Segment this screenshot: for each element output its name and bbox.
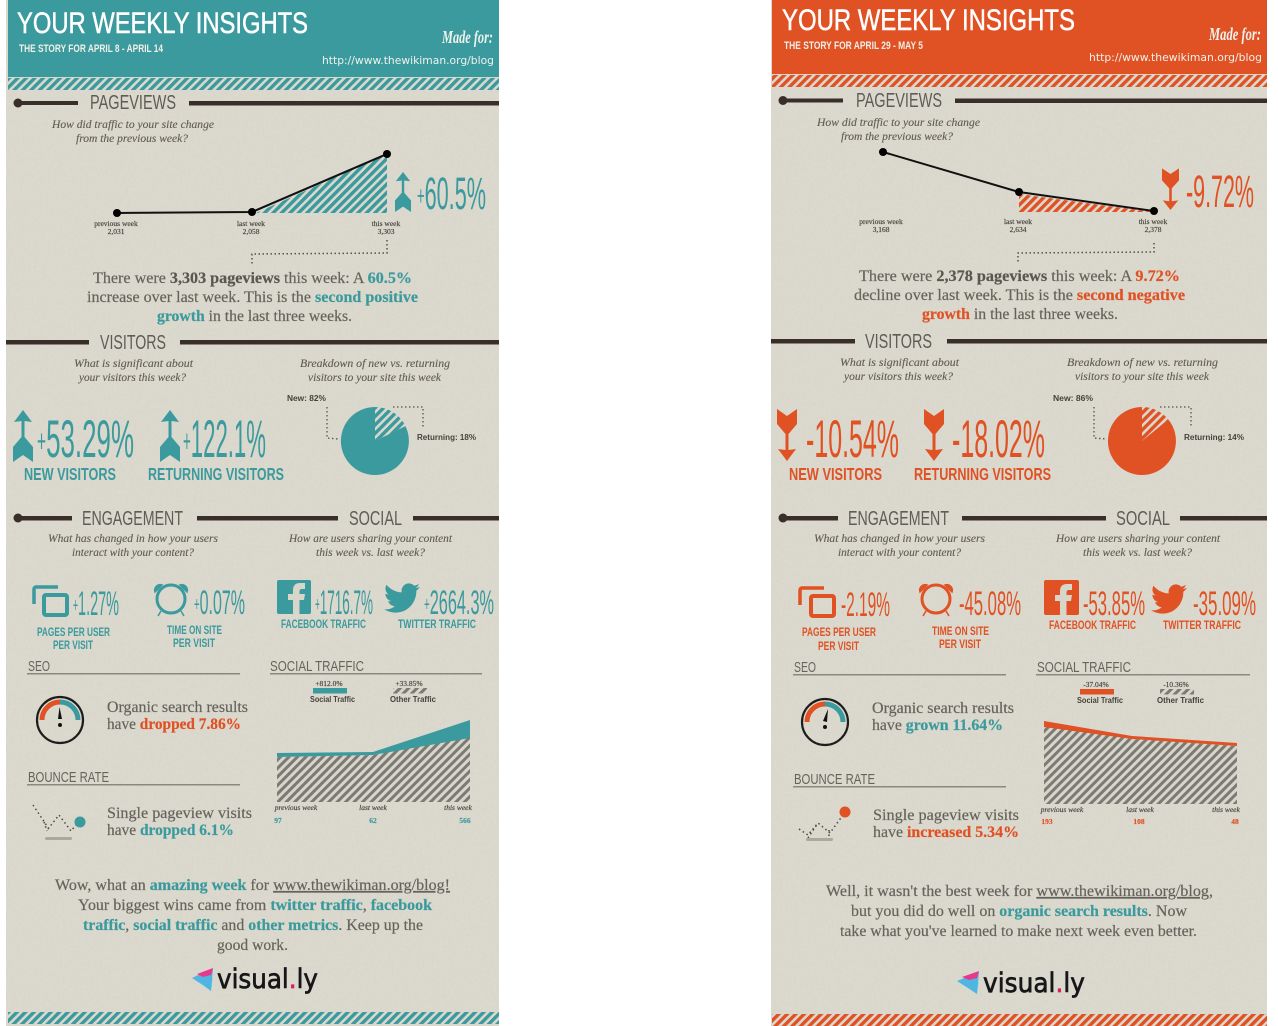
line chart: pageviews: 2,031	[108, 227, 125, 236]
closing message	[55, 877, 450, 954]
closing message: Well, it wasn't the best week for www.thewikiman.org/blog ,	[826, 883, 1213, 900]
arrow up: pageviews	[395, 172, 411, 212]
panel: orange weekly report: -53.85%	[1083, 585, 1145, 623]
pageviews summary	[854, 268, 1185, 323]
area chart: social traffic	[274, 720, 473, 825]
made for: Made for:	[441, 27, 493, 47]
pageviews summary: There were 2,378 pageviews this week: A 9.72%	[859, 268, 1180, 285]
engagement question: What has changed in how your users	[48, 533, 219, 545]
stat: twitter traffic: TWITTER TRAFFIC	[1163, 618, 1241, 632]
stat: twitter traffic: +	[424, 594, 430, 616]
social question: How are users sharing your content	[1055, 533, 1221, 545]
breakdown question	[1067, 357, 1218, 383]
chart legend: -37.04%	[1083, 680, 1109, 689]
stat: returning visitors: -18.02%	[952, 410, 1045, 469]
pageviews question: How did traffic to your site change	[51, 119, 214, 131]
area chart: social traffic: 62	[369, 816, 377, 825]
heading: bounce rate: BOUNCE RATE	[28, 769, 109, 786]
closing message: Wow, what an amazing week for www.thewikiman.org/blog!	[55, 877, 450, 894]
stat: returning visitors: RETURNING VISITORS	[914, 464, 1051, 484]
title: YOUR WEEKLY INSIGHTS	[782, 4, 1075, 37]
panel: orange weekly report: -2.19%	[841, 586, 890, 624]
url: http://www.thewikiman.org/blog	[322, 54, 494, 67]
breakdown question: Breakdown of new vs. returning	[1067, 357, 1218, 369]
area chart: social traffic: last week	[1126, 805, 1155, 814]
line chart: pageviews: last week	[1004, 217, 1032, 226]
pageviews summary: decline over last week. This is the second negative	[854, 287, 1185, 304]
seo text: Organic search results	[872, 700, 1014, 717]
chart legend: Social Traffic	[1077, 696, 1124, 705]
stat: pages per visit: +	[73, 595, 78, 617]
pageviews question	[816, 117, 980, 143]
icon: seo gauge	[802, 699, 848, 745]
title: YOUR WEEKLY INSIGHTS	[17, 7, 308, 40]
seo text	[872, 700, 1014, 734]
engagement question: interact with your content?	[838, 547, 961, 559]
dotted connector	[252, 240, 387, 265]
visitors question: What is significant about	[74, 358, 194, 370]
pageviews summary: growth in the last three weeks.	[922, 306, 1118, 323]
pageviews summary: growth in the last three weeks.	[157, 308, 352, 325]
bounce rate text	[107, 805, 252, 839]
icon: seo gauge	[37, 697, 83, 743]
stat: returning visitors: RETURNING VISITORS	[148, 464, 284, 484]
footer stripe band	[8, 1012, 499, 1024]
pie chart: new vs returning: Returning: 18%	[417, 433, 476, 442]
pie chart: new vs returning	[1053, 394, 1244, 475]
visitors question	[74, 358, 194, 384]
heading: pageviews: PAGEVIEWS	[90, 92, 176, 114]
chart legend	[1077, 680, 1205, 705]
panel: orange weekly report: -10.54%	[806, 410, 899, 469]
visitors question	[840, 357, 960, 383]
engagement question: interact with your content?	[72, 547, 194, 559]
stat: time on site: TIME ON SITE	[167, 623, 222, 637]
closing message	[826, 883, 1213, 940]
stat: facebook traffic: +	[315, 594, 320, 616]
pie chart: new vs returning	[287, 394, 476, 475]
header banner	[8, 0, 499, 77]
area chart: social traffic: this week	[1212, 805, 1241, 814]
stat: twitter traffic	[384, 583, 494, 631]
social question: How are users sharing your content	[288, 533, 453, 545]
area chart: social traffic: last week	[359, 803, 388, 812]
panel: teal weekly report: 60.5%	[425, 168, 486, 219]
stat: returning visitors: +	[183, 423, 191, 459]
stat: time on site: PER VISIT	[939, 637, 981, 651]
seo text: Organic search results	[107, 699, 248, 716]
stat: pages per visit: PER VISIT	[818, 639, 859, 653]
seo text: have grown 11.64%	[872, 717, 1003, 734]
stat: time on site: +	[194, 594, 200, 616]
panel: teal weekly report: 2664.3%	[430, 584, 494, 622]
stat: returning visitors	[914, 409, 1051, 484]
stat: time on site: PER VISIT	[173, 636, 215, 650]
dotted connector	[1018, 243, 1154, 263]
breakdown question: visitors to your site this week	[1075, 371, 1210, 383]
stat: new visitors	[13, 410, 134, 484]
stat: time on site: TIME ON SITE	[932, 624, 989, 638]
bounce rate text: Single pageview visits	[107, 805, 252, 822]
pageviews question: from the previous week?	[76, 133, 188, 145]
visitors question: What is significant about	[840, 357, 960, 369]
closing message: Your biggest wins came from twitter traffic, facebook	[78, 897, 432, 914]
social question	[288, 533, 453, 559]
heading: pageviews	[14, 92, 499, 114]
arrow down: pageviews	[1162, 168, 1179, 210]
bounce rate text	[873, 807, 1019, 841]
stat: pages per visit: PAGES PER USER	[37, 625, 110, 639]
stat: new visitors: +	[37, 423, 46, 459]
line chart: pageviews: 2,634	[1010, 225, 1027, 234]
bounce rate text: have dropped 6.1%	[107, 822, 234, 839]
area chart: social traffic: 566	[459, 816, 471, 825]
date range: THE STORY FOR APRIL 29 - MAY 5	[784, 40, 923, 52]
panel: teal weekly report: 0.07%	[200, 584, 245, 622]
chart legend: Social Traffic	[310, 695, 355, 704]
chart legend: Other Traffic	[1157, 696, 1205, 705]
stat: returning visitors	[148, 410, 284, 484]
heading: social traffic: SOCIAL TRAFFIC	[270, 658, 364, 675]
pageviews question	[51, 119, 214, 145]
stat: returning visitors: 122.1%	[191, 410, 266, 469]
panel: teal weekly report: 53.29%	[46, 410, 134, 469]
header stripe band	[8, 78, 499, 90]
line chart: pageviews	[859, 148, 1168, 234]
panel: teal weekly report	[6, 0, 499, 1026]
logo: visual.ly: visual.ly	[983, 968, 1085, 999]
pie chart: new vs returning: Returning: 14%	[1184, 433, 1244, 442]
line chart: pageviews: 2,378	[1145, 225, 1162, 234]
engagement question	[814, 533, 986, 559]
heading: engagement and social: SOCIAL	[349, 508, 402, 530]
stat: pages per visit: PER VISIT	[53, 638, 93, 652]
stat: new visitors: NEW VISITORS	[24, 464, 116, 484]
chart legend	[310, 679, 437, 704]
heading: visitors	[6, 332, 499, 354]
area chart: social traffic: previous week	[274, 803, 318, 812]
icon: bouncing ball	[799, 806, 850, 841]
heading: engagement and social: SOCIAL	[1116, 508, 1170, 530]
stat: facebook traffic: FACEBOOK TRAFFIC	[281, 617, 366, 631]
url: http://www.thewikiman.org/blog	[1089, 51, 1262, 64]
line chart: pageviews: this week	[372, 219, 401, 228]
stat: facebook traffic	[277, 580, 373, 631]
closing message: traffic, social traffic and other metrics. Keep up the	[83, 917, 423, 934]
closing message: good work.	[217, 937, 288, 954]
visitors question: your visitors this week?	[843, 371, 953, 383]
closing message: but you did do well on organic search results . Now	[851, 903, 1188, 920]
heading: pageviews	[778, 90, 1267, 112]
social question: this week vs. last week?	[1083, 547, 1192, 559]
stat: facebook traffic: FACEBOOK TRAFFIC	[1049, 618, 1136, 632]
engagement question: What has changed in how your users	[814, 533, 986, 545]
heading: engagement and social: ENGAGEMENT	[82, 508, 183, 530]
heading: engagement and social: ENGAGEMENT	[848, 508, 949, 530]
closing message: take what you've learned to make next week even better.	[840, 923, 1197, 940]
pageviews summary	[87, 270, 418, 325]
chart legend: +812.0%	[315, 679, 343, 688]
seo text: have dropped 7.86%	[107, 716, 241, 733]
heading: pageviews: PAGEVIEWS	[856, 90, 942, 112]
panel: teal weekly report: 1716.7%	[320, 584, 373, 622]
stat: twitter traffic: TWITTER TRAFFIC	[398, 617, 476, 631]
area chart: social traffic: 193	[1041, 817, 1053, 826]
pageviews summary: increase over last week. This is the second positive	[87, 289, 418, 306]
stat: facebook traffic	[1044, 580, 1145, 632]
panel: orange weekly report: -45.08%	[959, 585, 1021, 623]
chart legend: -10.36%	[1163, 680, 1189, 689]
stat: pages per visit: PAGES PER USER	[802, 625, 876, 639]
engagement question	[48, 533, 219, 559]
bounce rate text: have increased 5.34%	[873, 824, 1019, 841]
heading: social traffic: SOCIAL TRAFFIC	[1037, 659, 1131, 676]
visitors question: your visitors this week?	[78, 372, 186, 384]
area chart: social traffic: 97	[274, 816, 282, 825]
line chart: pageviews: this week	[1139, 217, 1168, 226]
footer stripe band	[772, 1014, 1267, 1026]
line chart: pageviews: previous week	[94, 219, 138, 228]
breakdown question: visitors to your site this week	[308, 372, 442, 384]
panel: orange weekly report	[771, 0, 1267, 1026]
line chart: pageviews: previous week	[859, 217, 903, 226]
line chart: pageviews: 3,303	[378, 227, 395, 236]
chart legend: Other Traffic	[390, 695, 437, 704]
header stripe band	[772, 75, 1267, 87]
heading: visitors: VISITORS	[100, 332, 166, 354]
heading: visitors	[771, 331, 1267, 353]
pageviews question: from the previous week?	[841, 131, 953, 143]
header banner	[772, 0, 1267, 74]
heading: visitors: VISITORS	[865, 331, 932, 353]
heading: bounce rate: BOUNCE RATE	[794, 771, 875, 788]
icon: bouncing ball	[33, 805, 86, 840]
bounce rate text: Single pageview visits	[873, 807, 1019, 824]
breakdown question: Breakdown of new vs. returning	[300, 358, 450, 370]
stat: time on site	[155, 584, 245, 650]
line chart: pageviews: 3,168	[873, 225, 890, 234]
logo: visual.ly: visual.ly	[217, 964, 318, 995]
heading: engagement and social	[778, 508, 1267, 530]
heading: seo: SEO	[28, 658, 50, 675]
stat: time on site	[920, 585, 1021, 651]
pageviews question: How did traffic to your site change	[816, 117, 980, 129]
line chart: pageviews: last week	[237, 219, 265, 228]
area chart: social traffic: this week	[444, 803, 473, 812]
stat: pages per visit	[800, 586, 890, 653]
area chart: social traffic: previous week	[1040, 805, 1084, 814]
stat: pages per visit	[34, 585, 119, 652]
area chart: social traffic	[1040, 721, 1241, 826]
pageviews summary: There were 3,303 pageviews this week: A 60.5%	[93, 270, 412, 287]
heading: engagement and social	[14, 508, 499, 530]
seo text	[107, 699, 248, 733]
date range: THE STORY FOR APRIL 8 - APRIL 14	[19, 43, 164, 55]
social question	[1055, 533, 1221, 559]
stat: new visitors: NEW VISITORS	[789, 464, 882, 484]
stat: twitter traffic	[1151, 584, 1256, 632]
area chart: social traffic: 48	[1231, 817, 1239, 826]
pie chart: new vs returning: New: 86%	[1053, 394, 1093, 403]
heading: seo: SEO	[794, 659, 816, 676]
pie chart: new vs returning: New: 82%	[287, 394, 326, 403]
stat: new visitors	[777, 409, 899, 484]
social question: this week vs. last week?	[316, 547, 425, 559]
stat: pageviews change: +	[417, 181, 425, 211]
line chart: pageviews: 2,058	[243, 227, 260, 236]
area chart: social traffic: 108	[1133, 817, 1145, 826]
line chart: pageviews	[94, 150, 401, 236]
breakdown question	[300, 358, 450, 384]
chart legend: +33.85%	[395, 679, 423, 688]
panel: teal weekly report: 1.27%	[78, 585, 119, 623]
